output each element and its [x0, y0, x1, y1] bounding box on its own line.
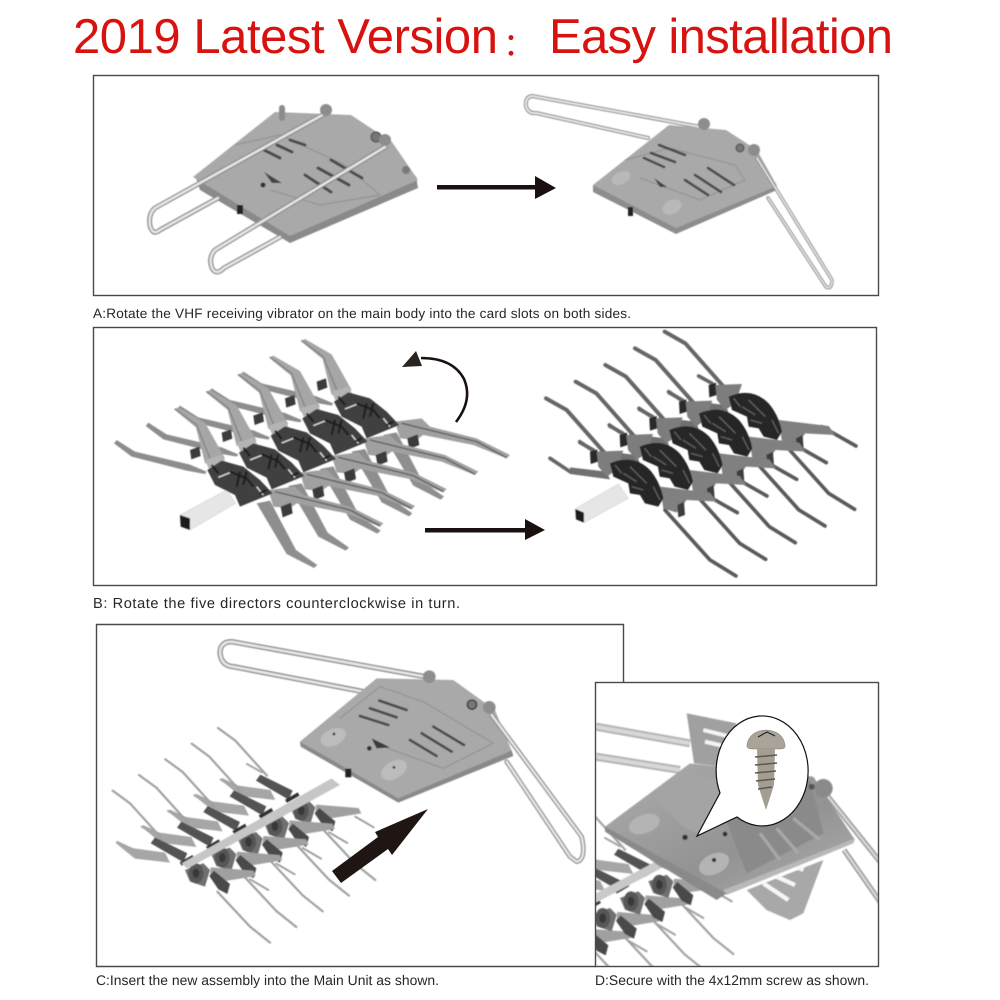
panel A: unfolded main unit: [526, 96, 832, 288]
directors, clipped to panel, drawn below the plate: [491, 802, 733, 1000]
icon: screw: [747, 730, 785, 810]
title: Easy installation: [549, 10, 893, 64]
caption A: A:Rotate the VHF receiving vibrator on the main body into the card slots on both sides.: [93, 306, 631, 321]
panel D: [491, 682, 880, 1000]
curved arrow B: [402, 351, 467, 422]
callout: screw: [697, 716, 808, 836]
panel A: folded main unit: [150, 104, 418, 272]
caption B: B: Rotate the five directors counterclockwise in turn.: [93, 596, 460, 612]
back plate: [687, 713, 737, 767]
panel B: folded directors: [546, 332, 856, 576]
straight arrow B: [425, 519, 545, 540]
arrow A: [437, 176, 556, 199]
panel B: unfolded directors: [114, 339, 510, 568]
title: [73, 10, 893, 64]
rods: [596, 727, 690, 770]
main underside: [605, 763, 855, 893]
title: 2019 Latest Version: [73, 10, 498, 64]
lower plate: [747, 860, 823, 920]
panel B frame: [94, 328, 876, 586]
title: ：: [503, 26, 535, 62]
panel C: director assembly: [113, 728, 375, 943]
big arrow C: [332, 809, 428, 883]
caption C: C:Insert the new assembly into the Main Unit as shown.: [96, 972, 439, 988]
panel C: main unit: [220, 642, 583, 862]
panel A frame: [94, 76, 878, 296]
caption D: D:Secure with the 4x12mm screw as shown.: [595, 972, 869, 988]
panel C frame: [96, 624, 624, 966]
